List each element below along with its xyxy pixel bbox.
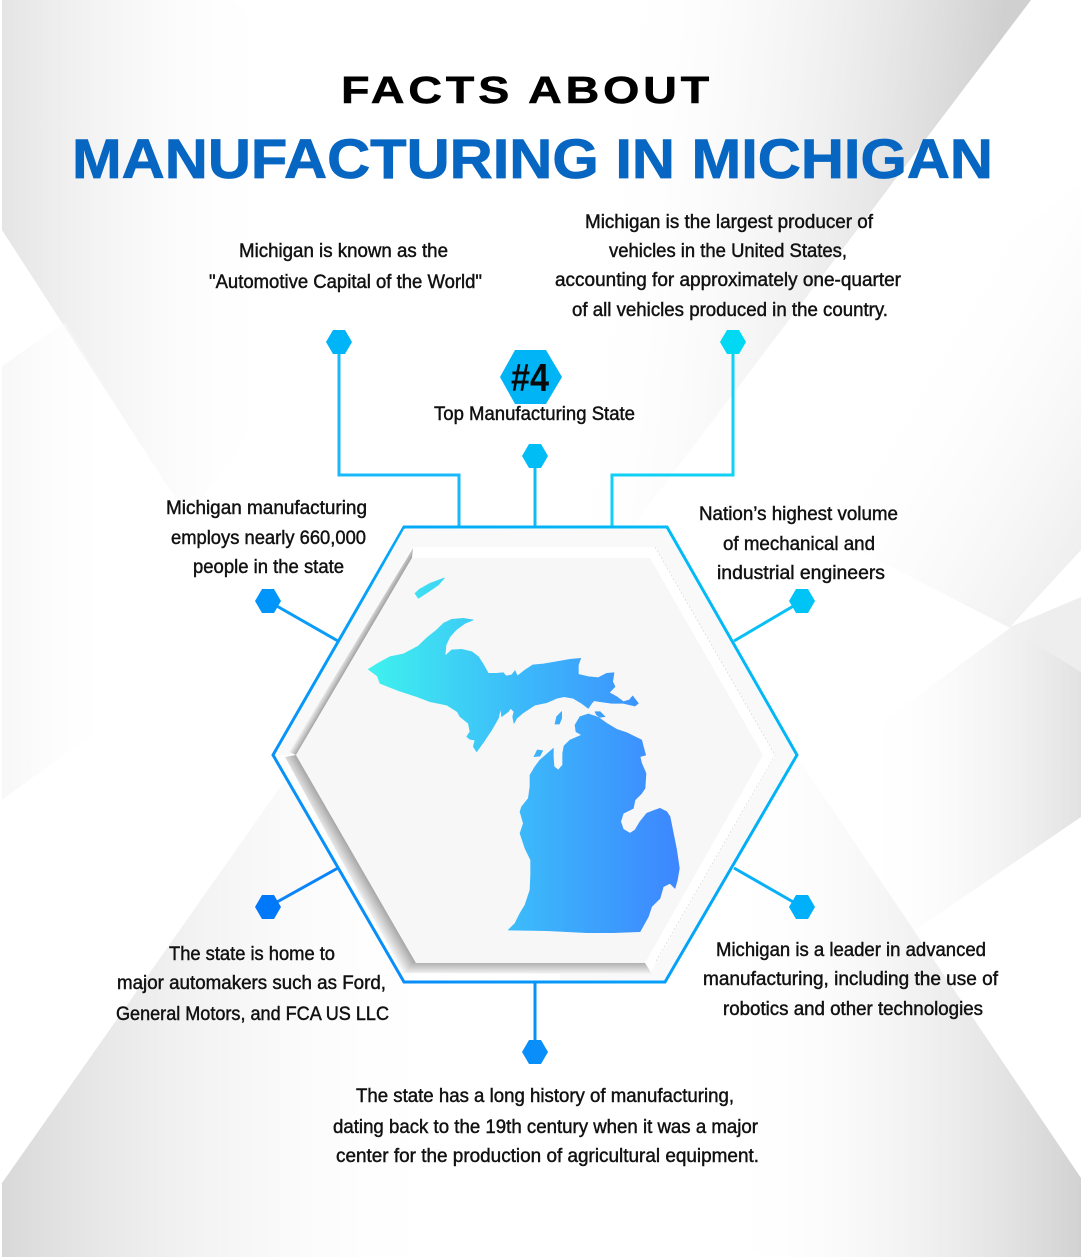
badge: #4: #4 [511,357,549,400]
small islands [534,750,543,757]
text: history: The state has a long history of manufacturing, [356,1085,734,1107]
text: engineers: of mechanical and [723,533,875,555]
text: largest producer: accounting for approximately one-quarter [555,269,901,291]
text: history: dating back to the 19th century when it was a major [333,1116,758,1138]
node: lower right [789,895,815,919]
node: top center [522,444,548,468]
text: engineers: industrial engineers [717,562,885,584]
dashed right edge [655,547,775,963]
upper band [276,529,795,755]
text: automakers: The state is home to [169,943,335,965]
node: lower left [255,895,281,919]
Beaver Island [555,712,562,724]
shadow bottom [403,963,652,974]
title line 1: FACTS ABOUT [341,70,713,112]
title line 2: MANUFACTURING IN MICHIGAN [72,127,993,190]
title [72,70,993,190]
text: history: center for the production of agricultural equipment. [336,1145,759,1167]
node: upper right [789,589,815,613]
text: largest producer: vehicles in the United States, [609,240,847,262]
text: largest producer: Michigan is the largest producer of [585,211,874,233]
node: top right [720,330,746,354]
white inner band [296,547,775,963]
text: largest producer: of all vehicles produced in the country. [572,299,888,321]
node: top left [326,330,352,354]
Isle Royale [415,578,444,598]
text: history [333,1085,759,1167]
text: automakers [116,943,389,1025]
badge caption: Top Manufacturing State [434,403,635,425]
text: automakers: General Motors, and FCA US LLC [116,1003,389,1025]
lower right band [560,755,795,980]
node: upper left [255,589,281,613]
hexagon outline [273,527,797,982]
central hexagon panel [273,527,797,982]
text: engineers: Nation’s highest volume [699,503,898,525]
Michigan map [368,578,679,933]
shadow lower left [285,755,416,973]
text: automakers: major automakers such as Ford, [117,972,386,994]
text: automotive capital: "Automotive Capital of the World" [209,271,482,293]
inner hexagon [296,558,763,963]
text: employment: employs nearly 660,000 [171,527,366,549]
text: advanced manufacturing: manufacturing, including the use of [703,968,999,990]
badge: #4 [500,350,562,404]
text: employment: people in the state [193,556,344,578]
node: bottom [522,1040,548,1064]
text: automotive capital [209,240,482,293]
text: employment [166,497,367,578]
text: largest producer [555,211,901,321]
text: advanced manufacturing: Michigan is a leader in advanced [716,939,986,961]
connector lines [268,342,802,1052]
text: advanced manufacturing [703,939,999,1020]
Lower Peninsula [508,714,679,933]
text: employment: Michigan manufacturing [166,497,367,519]
text: advanced manufacturing: robotics and other technologies [723,998,983,1020]
shadow upper left [289,548,413,755]
Upper Peninsula [368,618,638,752]
Bois Blanc Island [595,712,605,717]
text: automotive capital: Michigan is known as the [239,240,448,262]
text: engineers [699,503,898,584]
